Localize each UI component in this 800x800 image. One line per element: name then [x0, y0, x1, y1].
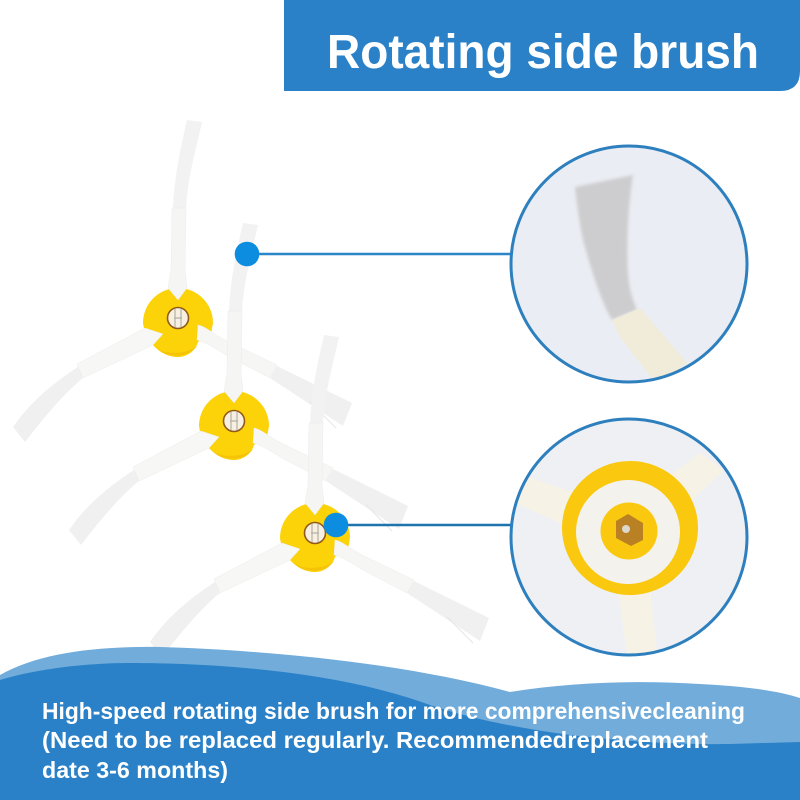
description text: date 3-6 months): [42, 757, 228, 783]
inner yellow: [600, 502, 658, 560]
description text: (Need to be replaced regularly. Recommendedreplacement: [42, 727, 708, 753]
hex bolt: [616, 514, 643, 546]
bristle close-up: [575, 175, 637, 320]
title banner: [284, 0, 800, 91]
white ring: [576, 480, 680, 584]
brush 1: [13, 120, 352, 442]
arm close-up: [612, 308, 687, 385]
title: Rotating side brush: [327, 26, 759, 79]
detail circle: hub underside: [511, 419, 747, 660]
arms close-up: [515, 453, 724, 660]
brush 3: [150, 335, 489, 657]
bottom wave: dark: [0, 663, 800, 800]
brush 2: [69, 223, 408, 545]
detail circle: bristle: [511, 146, 747, 385]
pointer: hub: [324, 513, 514, 537]
yellow disc: [562, 461, 698, 595]
description text: High-speed rotating side brush for more comprehensivecleaning: [42, 698, 745, 724]
bottom wave: light: [0, 647, 800, 800]
description text: [42, 698, 745, 783]
pointer: upper bristle: [235, 242, 514, 266]
